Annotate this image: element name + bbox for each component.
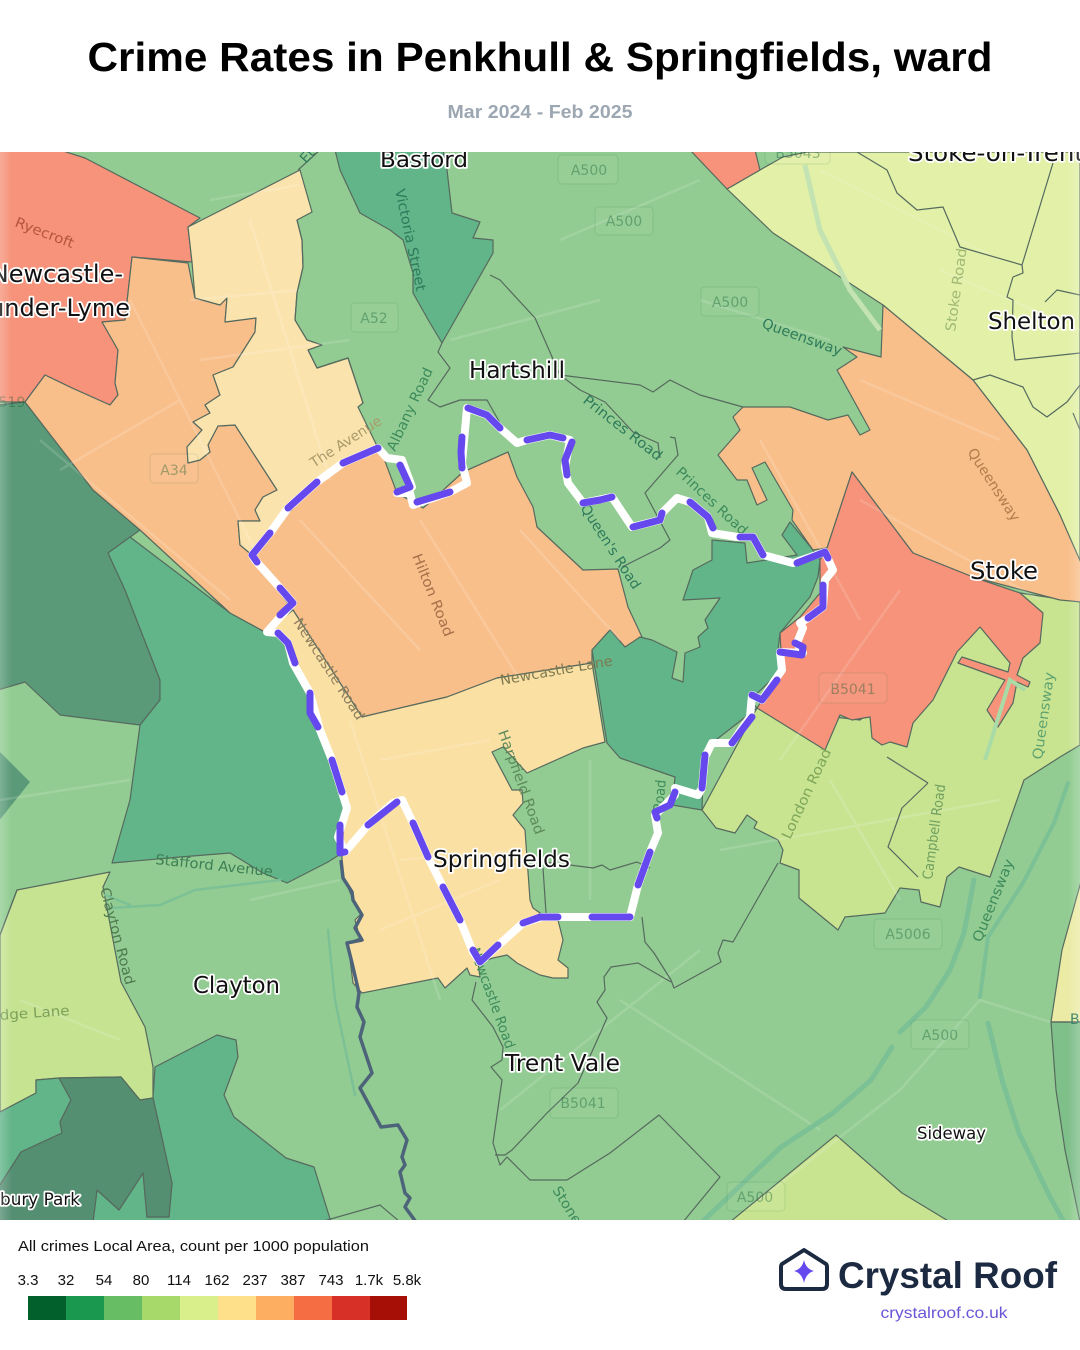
area: mid green far south-west [0, 1078, 71, 1188]
road labels: Queensway [760, 316, 844, 359]
road badges: A500 [571, 163, 607, 179]
area: darker green far right [1051, 1022, 1080, 1220]
legend tick labels: 32 [58, 1272, 74, 1289]
road labels: Stone [549, 1184, 584, 1228]
road labels: Albany Road [384, 365, 437, 454]
legend tick labels [18, 1272, 422, 1289]
area: cream south [265, 610, 605, 993]
area: dark green patch [0, 750, 30, 822]
legend title: All crimes Local Area, count per 1000 population [18, 1238, 369, 1255]
place labels: Stoke-on-Trent [908, 139, 1080, 167]
title: Crime Rates in Penkhull & Springfields, ward [88, 34, 992, 80]
road labels: Newcastle Road [290, 615, 367, 723]
legend tick labels: 5.8k [393, 1272, 422, 1289]
road labels: Princes Road [672, 464, 750, 539]
road labels: B [1070, 1012, 1080, 1028]
area: salmon Newcastle [0, 150, 200, 405]
area: orange east [718, 305, 1080, 602]
road badges: A500 [922, 1028, 958, 1044]
road badges: A5006 [885, 927, 931, 943]
road badges: A52 [360, 311, 388, 327]
legend tick labels: 237 [242, 1272, 268, 1289]
brand name: Crystal Roof [838, 1255, 1058, 1296]
road labels: Stafford Avenue [155, 852, 274, 880]
area: salmon Stoke [757, 472, 1043, 750]
area: yellow-green south [730, 1135, 950, 1222]
road badges: A500 [606, 214, 642, 230]
river boundary: thick dark line [341, 860, 416, 1222]
area: mid green south-west [93, 1035, 331, 1222]
brand url: crystalroof.co.uk [880, 1305, 1009, 1322]
place labels: Basford [380, 148, 468, 173]
area: yellow-green west [0, 872, 153, 1112]
area: salmon north top [690, 150, 760, 189]
place labels: bury Park [0, 1190, 80, 1210]
road badges: A500 [737, 1190, 773, 1206]
area boundaries [0, 150, 1080, 1222]
road labels: Road [651, 779, 670, 812]
map base: light green areas [0, 152, 1080, 1220]
road labels: Victoria Street [391, 188, 428, 293]
legend tick labels: 743 [318, 1272, 344, 1289]
road labels: Campbell Road [920, 783, 949, 881]
road labels: Queensway [964, 445, 1023, 525]
legend tick labels: 54 [96, 1272, 112, 1289]
area: mid green Basford [335, 150, 493, 343]
road badges: A500 [712, 295, 748, 311]
road labels: Queensway [970, 857, 1018, 944]
road labels: The Avenue [307, 413, 385, 472]
road badges: B5041 [830, 682, 876, 698]
legend tick labels: 162 [204, 1272, 230, 1289]
legend colour scale [28, 1296, 407, 1320]
area: pale yellow north-east [727, 152, 1080, 565]
road labels: Clayton Road [96, 886, 137, 987]
road labels: Queen's Road [577, 501, 643, 592]
area: dark green south-west [0, 1077, 172, 1222]
road badges: B5041 [560, 1096, 606, 1112]
road labels: Queensway [1030, 671, 1058, 761]
road badges: B5043 [775, 146, 821, 162]
place labels [0, 139, 1080, 1210]
road labels: Ryecroft [13, 215, 77, 252]
road labels: Newcastle Road [466, 946, 518, 1051]
road labels: Hilton Road [408, 552, 456, 639]
road badges [0, 140, 969, 1211]
road labels: Newcastle Lane [499, 653, 614, 689]
icon: house with star [781, 1250, 827, 1289]
area: pale strip far right [1051, 878, 1080, 1022]
place labels: Trent Vale [504, 1051, 620, 1077]
legend tick labels: 114 [167, 1272, 191, 1289]
ward boundary: Penkhull & Springfields [252, 408, 833, 962]
area: mid green central [592, 522, 820, 810]
road labels: Princes Road [580, 393, 665, 464]
road labels: Harpfield Road [494, 728, 547, 837]
boundary white line [252, 408, 833, 962]
area: orange west [25, 257, 293, 632]
place labels: Clayton [193, 973, 280, 999]
area: yellow-green east [702, 593, 1080, 930]
area: dark green west [0, 402, 160, 725]
area: mid green west [108, 537, 345, 883]
legend tick labels: 80 [133, 1272, 149, 1289]
road labels: London Road [779, 746, 835, 842]
road labels: Stoke Road [943, 247, 971, 333]
place labels: Springfields [433, 847, 570, 873]
roads and waterways texture [0, 165, 1080, 1222]
road labels: Etr [297, 141, 323, 167]
road badges: A34 [160, 463, 188, 479]
legend tick labels: 3.3 [18, 1272, 38, 1289]
area: cream north [187, 170, 378, 555]
boundary purple dashes [252, 408, 828, 962]
legend tick labels: 387 [280, 1272, 306, 1289]
legend [18, 1238, 422, 1320]
place labels: Sideway [917, 1124, 986, 1144]
brand logo [781, 1250, 1058, 1322]
place labels: Stoke [970, 557, 1038, 585]
road labels: dge Lane [0, 1003, 70, 1024]
subtitle: date range: Mar 2024 - Feb 2025 [448, 102, 632, 122]
place labels: Shelton [988, 309, 1075, 335]
map edge fade [0, 152, 1080, 1220]
place labels: Hartshill [469, 358, 565, 384]
legend tick labels: 1.7k [355, 1272, 384, 1289]
area: orange central [252, 448, 642, 717]
